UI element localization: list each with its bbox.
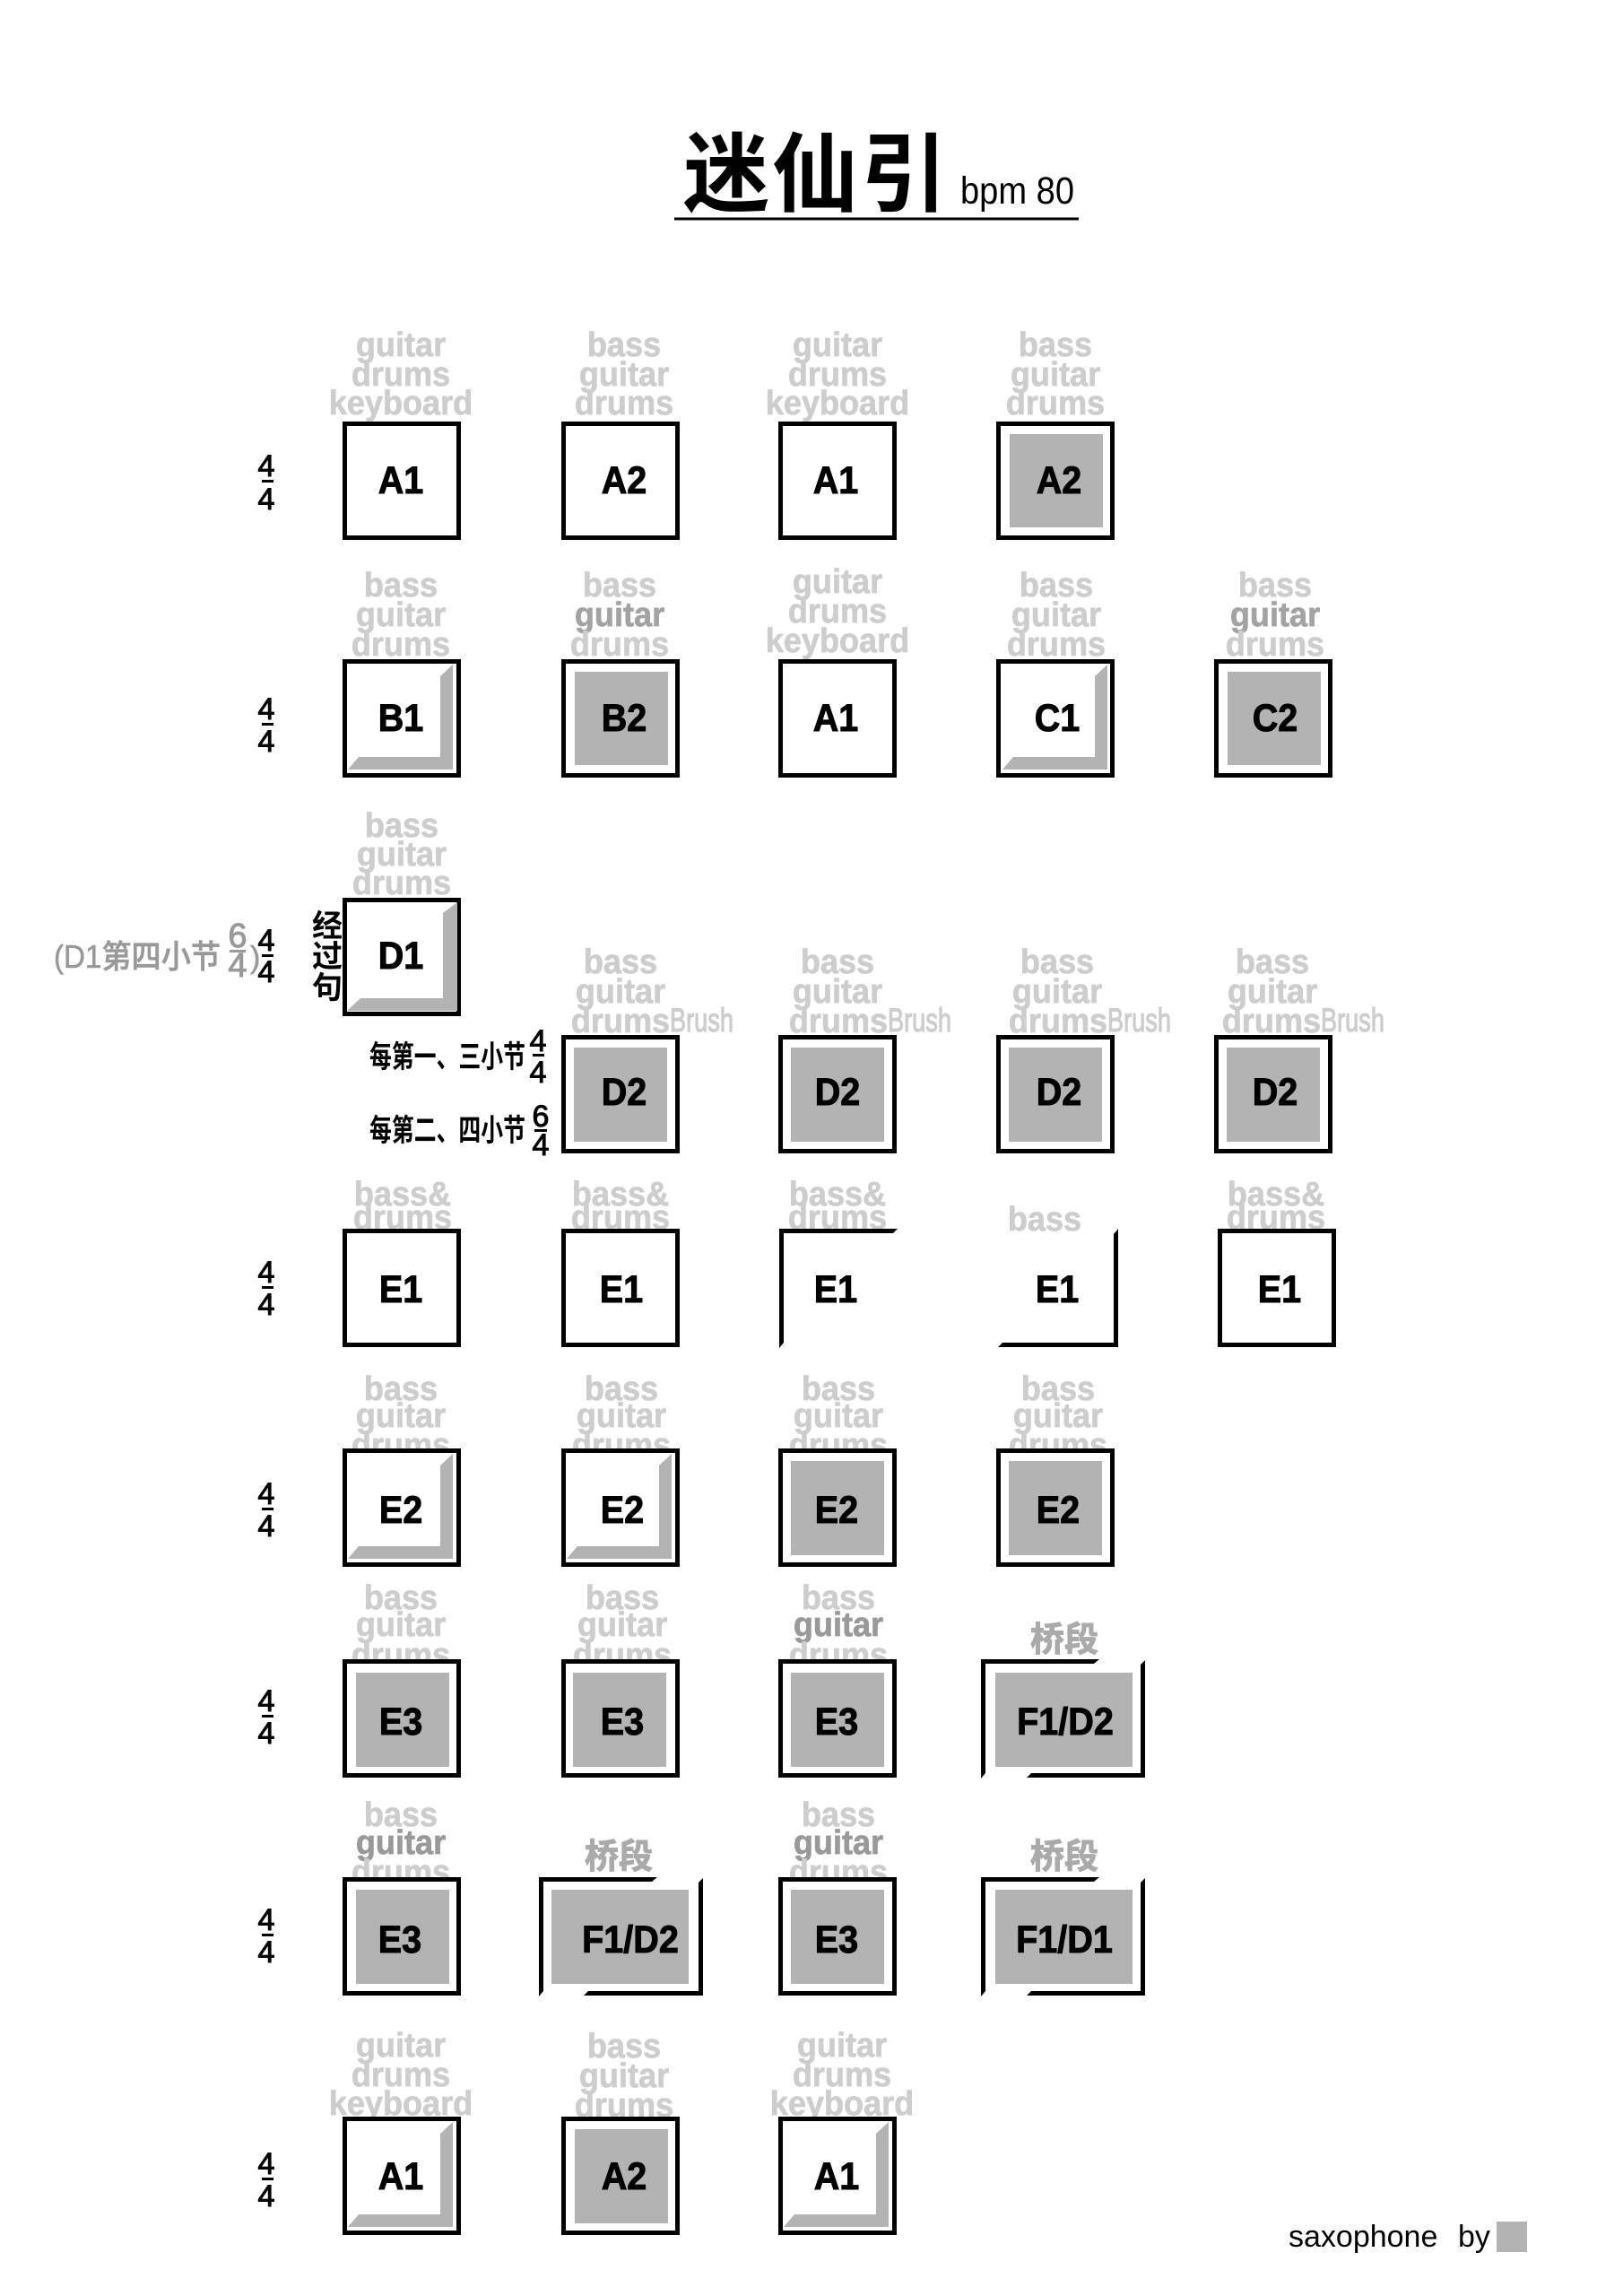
bar: A1	[329, 325, 473, 538]
time signature: row 1: 4	[258, 449, 274, 483]
bar: A1	[329, 2025, 473, 2233]
bar: E3 filled, guitar emphasised: E3	[815, 1700, 858, 1743]
bar: E3 filled: E3	[601, 1700, 644, 1743]
bar: C1	[999, 565, 1112, 775]
title: bpm 80	[960, 170, 1074, 213]
bar: A2 filled: A2	[602, 2154, 647, 2197]
bar: A1: drums	[352, 2055, 450, 2093]
bar: E3 filled, guitar emphasised: E3	[378, 1918, 421, 1961]
bar: D2: D2	[1037, 1070, 1081, 1113]
bar: B1: drums	[352, 624, 450, 663]
bar: E3 filled, guitar emphasised: bass	[364, 1795, 438, 1833]
bar: E3 filled, guitar emphasised: drums	[789, 1635, 888, 1674]
bar: A1	[766, 325, 909, 538]
bar: E1: E1	[600, 1267, 643, 1310]
bar: A1: keyboard	[766, 383, 909, 422]
bar: F1/D1 bridge: 桥段	[1030, 1839, 1098, 1876]
bar: E2: bass	[585, 1369, 658, 1407]
bar: F1/D2 bridge: F1/D2	[582, 1918, 679, 1961]
bar: A2 filled: drums	[1006, 383, 1105, 422]
bar: D2: guitar	[793, 971, 882, 1010]
bar: D2: D2	[602, 1070, 647, 1113]
bar: F1/D2 bridge	[981, 1622, 1145, 1779]
bar: B2 filled: B2	[602, 696, 647, 739]
bar: F1/D2 bridge: F1/D2	[1017, 1700, 1114, 1743]
bar: C2 filled	[1216, 565, 1331, 775]
bar: E2 filled	[999, 1369, 1112, 1564]
bar: D2: guitar	[1228, 971, 1317, 1010]
bar: E3 filled, guitar emphasised: guitar	[794, 1605, 883, 1643]
bar: B1: guitar	[356, 595, 446, 633]
bar: E1 open bottom-right: bass	[1008, 1199, 1081, 1238]
bar: E2: E2	[379, 1488, 422, 1531]
bar: E1 open top-left	[779, 1174, 898, 1348]
bar: E2 filled: bass	[802, 1369, 875, 1407]
bar: E3 filled, guitar emphasised: drums	[352, 1852, 450, 1891]
bar: E3 filled	[563, 1578, 678, 1776]
time signature: row 9: 4	[258, 2179, 274, 2213]
bar: E2: guitar	[577, 1396, 666, 1434]
time signature: row 3: 4	[258, 924, 274, 958]
time signature: row 6: 4	[258, 1509, 274, 1544]
bar: D2: bass	[584, 942, 657, 980]
bar: D2: drums	[1222, 1001, 1321, 1039]
bar: E1 open top-left: drums	[788, 1197, 887, 1236]
note: D1 fourth bar time signature: )	[250, 941, 260, 975]
time signature: row 7	[258, 1684, 274, 1751]
bar: C1: guitar	[1011, 595, 1101, 633]
bar: E3 filled, guitar emphasised: bass	[802, 1795, 875, 1833]
bar: E3 filled: guitar	[577, 1605, 667, 1643]
bar: B1: bass	[364, 565, 438, 604]
bar: E3 filled, guitar emphasised	[344, 1795, 459, 1993]
bar: A2 filled	[999, 325, 1112, 538]
bar: D2: guitar	[1012, 971, 1102, 1010]
bar: A1: A1	[813, 696, 858, 739]
bar: D2	[1216, 942, 1384, 1152]
bar: A1: drums	[788, 591, 887, 630]
bar: E2 filled: drums	[1009, 1425, 1107, 1464]
time signature: row 7: 4	[258, 1684, 274, 1718]
bar: A1: A1	[814, 2154, 859, 2197]
bar: D2: bass	[1236, 942, 1309, 980]
time signature: row 8: 4	[258, 1935, 274, 1970]
bar: E2	[344, 1369, 459, 1564]
time signature: row 2	[258, 692, 274, 759]
time signature: row 8	[258, 1903, 274, 1970]
bar: E3 filled: drums	[573, 1635, 672, 1674]
time signature: row 8: 4	[258, 1903, 274, 1937]
bar: A1	[770, 2025, 914, 2233]
bar: A1	[766, 561, 909, 775]
vertical label: passage	[312, 909, 343, 1005]
bar: E3 filled: bass	[586, 1578, 659, 1616]
bar: E3 filled: bass	[364, 1578, 438, 1616]
title: 迷仙引	[683, 127, 950, 223]
bar: E2 filled: drums	[789, 1425, 888, 1464]
bar: C1: bass	[1020, 565, 1093, 604]
note: second and fourth bars: 6	[533, 1100, 549, 1134]
bar: D2: drums	[1009, 1001, 1107, 1039]
bar: A2 filled: guitar	[579, 2056, 669, 2094]
bar: B2 filled	[563, 565, 678, 775]
time signature: row 5: 4	[258, 1288, 274, 1322]
time signature: row 6: 4	[258, 1477, 274, 1511]
bar: E3 filled, guitar emphasised	[780, 1795, 895, 1993]
bar: E3 filled	[344, 1578, 459, 1776]
time signature: row 3: 4	[258, 955, 274, 989]
note: D1 fourth bar time signature: 6	[228, 918, 247, 955]
time signature: row 7: 4	[258, 1717, 274, 1751]
bar: A2	[563, 325, 678, 538]
credit	[1289, 2220, 1527, 2254]
bar: E1: drums	[571, 1197, 670, 1236]
bar: D2: Brush	[888, 1002, 951, 1039]
note: D1 fourth bar time signature	[54, 918, 260, 985]
bar: A2 filled: drums	[575, 2085, 673, 2124]
bar: A1: A1	[378, 2154, 423, 2197]
bar: A1: guitar	[797, 2025, 887, 2064]
credit: saxophone	[1289, 2220, 1437, 2254]
bar: F1/D1 bridge	[981, 1839, 1145, 1996]
bar: E1 open bottom-right	[998, 1199, 1118, 1347]
bar: E3 filled, guitar emphasised: E3	[815, 1918, 858, 1961]
bar: F1/D1 bridge: F1/D1	[1016, 1918, 1113, 1961]
bar: E3 filled: drums	[352, 1635, 450, 1674]
time signature: row 5	[258, 1256, 274, 1322]
bar: E1: E1	[379, 1267, 422, 1310]
bar: E2 filled	[780, 1369, 895, 1564]
bar: A1: drums	[788, 354, 887, 393]
bar: A1: drums	[793, 2055, 891, 2093]
time signature: row 9	[258, 2147, 274, 2213]
time signature: row 1	[258, 449, 274, 517]
bar: A2: drums	[575, 383, 673, 422]
note: D1 fourth bar time signature: 4	[228, 947, 247, 985]
bar: E2	[563, 1369, 678, 1564]
bar: D2	[780, 942, 951, 1152]
bar: E1 open bottom-right: E1	[1036, 1267, 1079, 1310]
bar: F1/D2 bridge: 桥段	[1030, 1622, 1098, 1659]
bar: E1	[1219, 1174, 1334, 1345]
bar: C2 filled: C2	[1253, 696, 1298, 739]
bar: B2 filled: drums	[570, 624, 669, 663]
bar: A1: guitar	[356, 2025, 446, 2064]
bar: A1: keyboard	[329, 2083, 473, 2122]
bar: E2: E2	[601, 1488, 644, 1531]
bar: A2: guitar	[579, 354, 669, 393]
bar: D2: bass	[801, 942, 874, 980]
bar: E2: drums	[572, 1425, 671, 1464]
bar: E3 filled, guitar emphasised: guitar	[794, 1822, 883, 1861]
bar: A2 filled	[563, 2026, 678, 2233]
bar: B2 filled: guitar	[575, 595, 664, 633]
bar: C2 filled: bass	[1238, 565, 1312, 604]
note: second and fourth bars: 每第二、四小节	[369, 1114, 525, 1148]
bar: D1	[344, 805, 459, 1013]
bar: D2: Brush	[670, 1002, 733, 1039]
bar: C2 filled: drums	[1226, 624, 1324, 663]
bar: A1: keyboard	[329, 383, 473, 422]
bar: C1: C1	[1035, 696, 1080, 739]
bar: D1: guitar	[357, 834, 447, 873]
bar: A2 filled: bass	[1019, 325, 1092, 363]
bar: D2	[999, 942, 1171, 1152]
bar: E2: drums	[352, 1425, 450, 1464]
bar: A2 filled: A2	[1037, 458, 1081, 501]
bar: E1	[563, 1174, 678, 1345]
title	[674, 127, 1079, 223]
bar: E3 filled: guitar	[356, 1605, 446, 1643]
bar: A1: guitar	[356, 325, 446, 363]
vertical label: passage: 经	[312, 909, 343, 944]
time signature: row 2: 4	[258, 725, 274, 759]
bar: A1: A1	[378, 458, 423, 501]
bar: A2: bass	[587, 325, 661, 363]
bar: D2: Brush	[1321, 1002, 1384, 1039]
bar: E2: bass	[364, 1369, 438, 1407]
bar: D2: D2	[1253, 1070, 1298, 1113]
bar: E1: bass&	[354, 1174, 451, 1213]
bar: E3 filled, guitar emphasised	[780, 1578, 895, 1776]
bar: E2 filled: guitar	[1013, 1396, 1103, 1434]
bar: B1: B1	[378, 696, 423, 739]
bar: D2: guitar	[576, 971, 665, 1010]
bar: C1: drums	[1007, 624, 1106, 663]
bar: E3 filled, guitar emphasised: drums	[789, 1852, 888, 1891]
bar: D1: drums	[352, 863, 451, 901]
bar: D2: Brush	[1107, 1002, 1171, 1039]
bar: E1: bass&	[572, 1174, 669, 1213]
bar: E1	[344, 1174, 459, 1345]
credit: by	[1458, 2220, 1490, 2254]
time signature: row 5: 4	[258, 1256, 274, 1290]
note: second and fourth bars	[369, 1100, 549, 1162]
bar: D2: D2	[815, 1070, 860, 1113]
bar: A2 filled: bass	[587, 2026, 661, 2065]
vertical label: passage: 过	[312, 940, 343, 974]
time signature: row 6	[258, 1477, 274, 1544]
vertical label: passage: 句	[312, 971, 343, 1005]
bar: A1: guitar	[793, 561, 882, 600]
note: second and fourth bars: 4	[533, 1128, 549, 1162]
note: first and third bars	[369, 1024, 546, 1090]
bar: A1: keyboard	[770, 2083, 914, 2122]
note: first and third bars: 每第一、三小节	[369, 1040, 525, 1074]
bar: C2 filled: guitar	[1230, 595, 1320, 633]
bar: D2	[563, 942, 733, 1152]
bar: D2: bass	[1020, 942, 1094, 980]
bar: A1: keyboard	[766, 621, 909, 659]
bar: F1/D2 bridge: 桥段	[585, 1839, 653, 1876]
bar: E3 filled, guitar emphasised: guitar	[356, 1822, 446, 1861]
bar: D1: bass	[365, 805, 438, 844]
note: first and third bars: 4	[530, 1056, 546, 1090]
bar: E2 filled: E2	[1037, 1488, 1080, 1531]
bar: E2 filled: E2	[815, 1488, 858, 1531]
time signature: row 9: 4	[258, 2147, 274, 2181]
note: first and third bars: 4	[530, 1024, 546, 1058]
time signature: row 3	[258, 924, 274, 989]
bar: E1: bass&	[1228, 1174, 1324, 1213]
time signature: row 1: 4	[258, 483, 274, 517]
bar: E3 filled: E3	[379, 1700, 422, 1743]
bar: A1: guitar	[793, 325, 882, 363]
bar: E1: drums	[1227, 1197, 1325, 1236]
bar: E2: guitar	[356, 1396, 446, 1434]
bar: A1: drums	[352, 354, 450, 393]
time signature: row 2: 4	[258, 692, 274, 726]
bar: D2: drums	[571, 1001, 670, 1039]
bar: D2: drums	[789, 1001, 888, 1039]
bar: B2 filled: bass	[583, 565, 656, 604]
bar: A1: A1	[813, 458, 858, 501]
bar: B1	[344, 565, 459, 775]
bar: E2 filled: bass	[1021, 1369, 1095, 1407]
bar: E1 open top-left: bass&	[789, 1174, 886, 1213]
bar: D1: D1	[378, 934, 423, 977]
bar: F1/D2 bridge	[539, 1839, 703, 1996]
bar: E1: E1	[1258, 1267, 1301, 1310]
bar: A2: A2	[602, 458, 647, 501]
bar: E1 open top-left: E1	[814, 1267, 857, 1310]
note: D1 fourth bar time signature: (D1第四小节	[54, 938, 221, 975]
bar: E1: drums	[353, 1197, 452, 1236]
bar: A2 filled: guitar	[1011, 354, 1100, 393]
bar: E2 filled: guitar	[794, 1396, 883, 1434]
bar: E3 filled, guitar emphasised: bass	[802, 1578, 875, 1616]
